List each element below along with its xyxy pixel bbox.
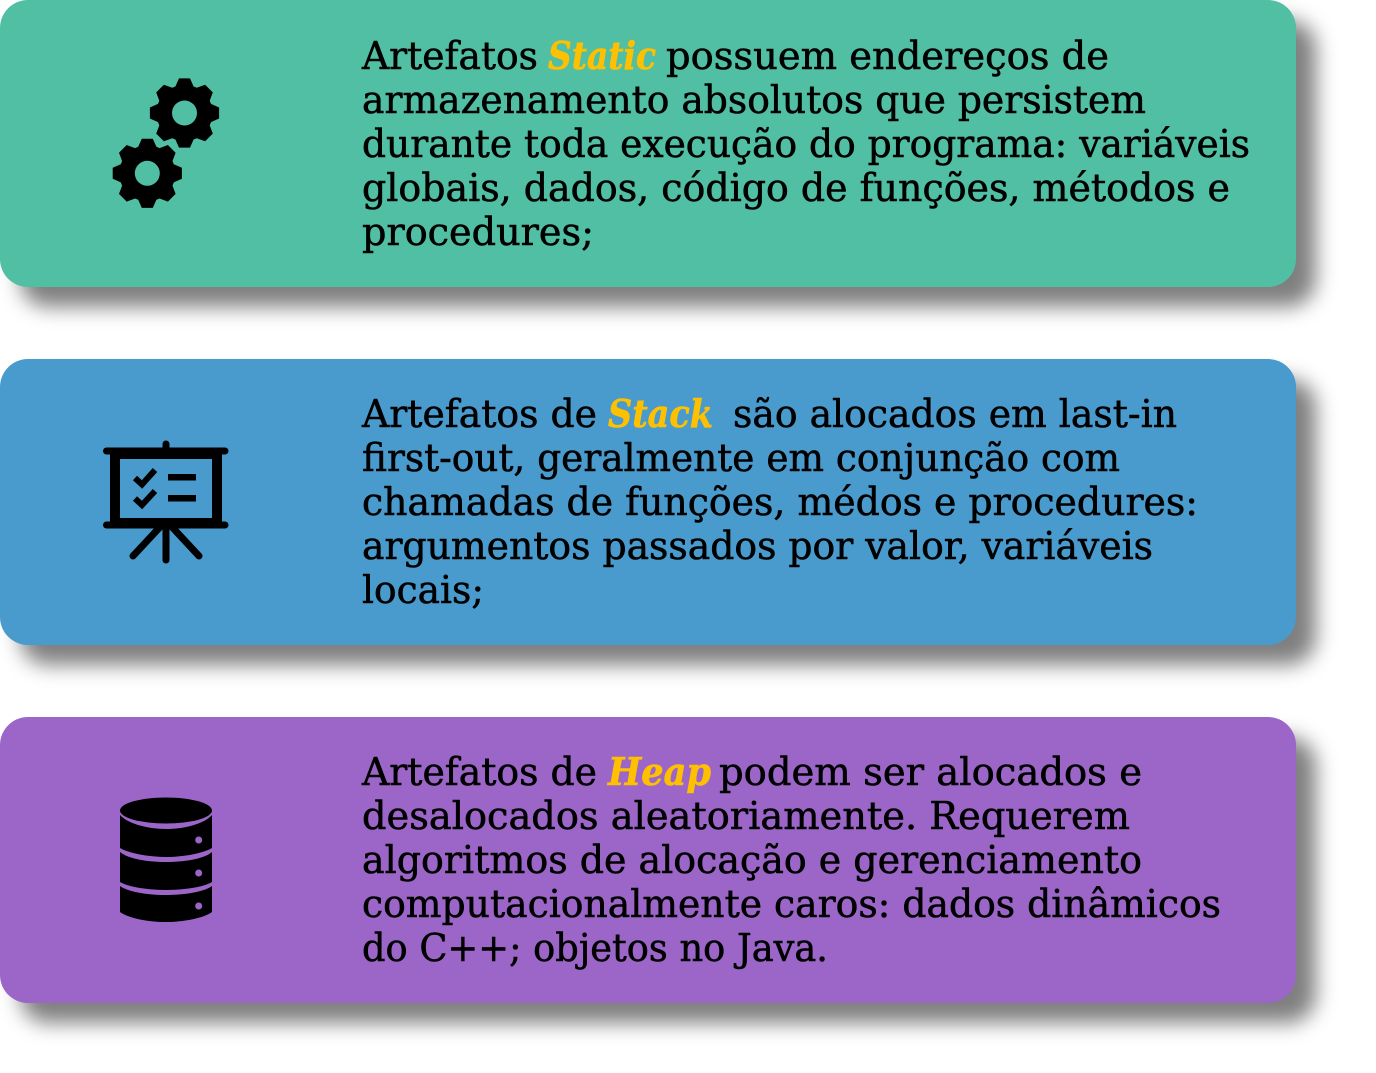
text: heap description — [361, 749, 1221, 970]
text: static description: durante toda execução do programa: variáveis — [362, 122, 1250, 166]
panel: static — [0, 0, 1316, 307]
panel: stack — [0, 359, 1316, 665]
text: stack description: argumentos passados por valor, variáveis — [362, 524, 1153, 568]
text: heap description: podem ser alocados e — [719, 750, 1142, 794]
text: stack description: first-out, geralmente em conjunção com — [362, 436, 1120, 480]
text: stack description: Stack — [608, 391, 713, 436]
text: heap description: do C++; objetos no Java. — [362, 926, 828, 970]
text: static description — [361, 33, 1250, 254]
text: static description: Static — [548, 33, 656, 78]
text: static description: armazenamento absolutos que persistem — [362, 78, 1146, 122]
text: heap description: desalocados aleatoriamente. Requerem — [362, 794, 1130, 838]
text: stack description — [361, 391, 1198, 612]
icon: database — [120, 798, 212, 922]
text: stack description: Artefatos de — [361, 392, 597, 436]
icon: presentation board — [106, 444, 225, 560]
text: heap description: computacionalmente caros: dados dinâmicos — [362, 882, 1221, 926]
text: heap description: algoritmos de alocação e gerenciamento — [362, 838, 1142, 882]
text: static description: procedures; — [362, 210, 594, 254]
text: heap description: Artefatos de — [361, 750, 597, 794]
text: stack description: chamadas de funções, médos e procedures: — [362, 480, 1198, 524]
text: static description: Artefatos — [361, 34, 538, 78]
panel: heap — [0, 717, 1316, 1023]
text: static description: globais, dados, código de funções, métodos e — [362, 166, 1230, 210]
text: heap description: Heap — [607, 749, 711, 794]
text: stack description: locais; — [362, 568, 484, 612]
text: stack description: são alocados em last-in — [733, 392, 1177, 436]
text: static description: possuem endereços de — [666, 34, 1109, 78]
icon: gears — [113, 78, 219, 208]
